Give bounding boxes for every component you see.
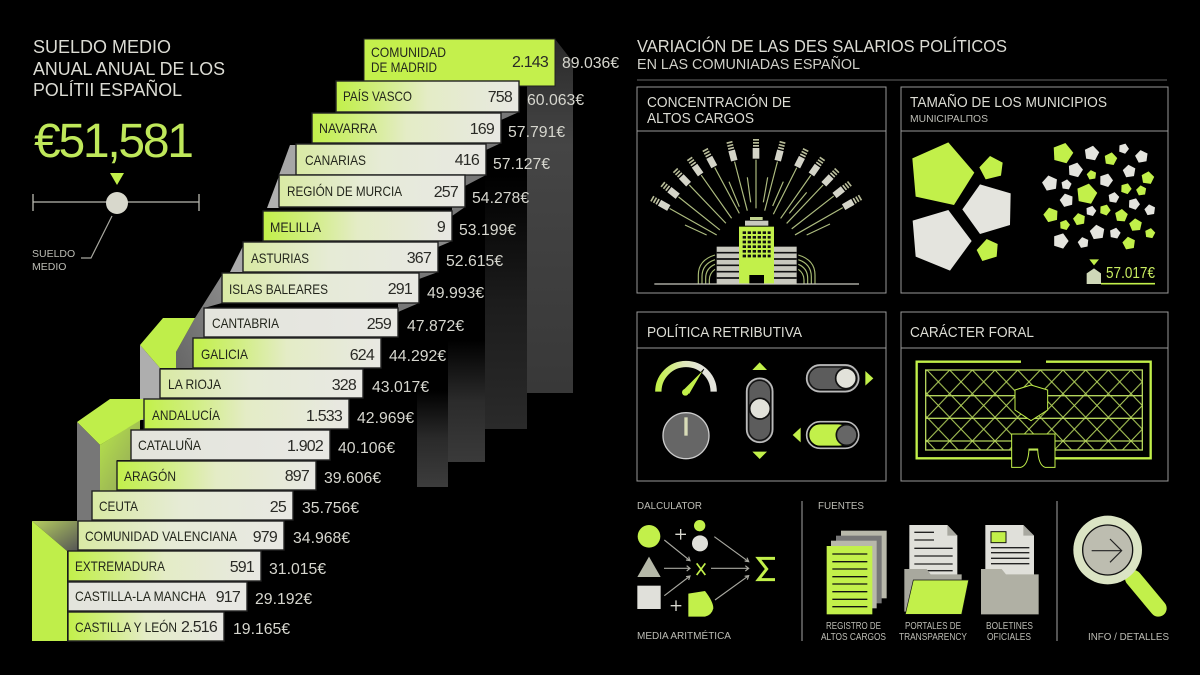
bar: La Rioja: 43.017€	[372, 379, 429, 396]
bar: Comunidad de Madrid: COMUNIDAD	[371, 44, 446, 60]
icon: rays and building	[650, 139, 862, 284]
icon: gauge and dial	[658, 364, 714, 459]
bar: Islas Baleares: 291	[388, 281, 413, 298]
bar: Cantabria: CANTABRIA	[212, 315, 280, 331]
bar: Comunidad Valenciana: 979	[253, 529, 278, 546]
bar: Región de Murcia: REGIÓN DE MURCIA	[287, 183, 403, 199]
bar: Andalucía: 1.533	[306, 408, 343, 425]
icon: document stack	[827, 531, 887, 614]
house value: 57.017€	[1106, 265, 1155, 282]
bar: Andalucía: 42.969€	[357, 410, 414, 427]
bar: Comunidad de Madrid	[364, 39, 619, 86]
bar: Cantabria	[204, 308, 464, 337]
scale label: SUELDO	[32, 248, 75, 260]
icon: folder with documents	[904, 525, 969, 614]
bar: Región de Murcia	[279, 175, 529, 216]
bar: Cantabria: 259	[367, 316, 392, 333]
icon: magnifier	[1073, 516, 1158, 608]
bar: Melilla	[263, 211, 516, 247]
bar: Cantabria: 47.872€	[407, 318, 464, 335]
source labels: ALTOS CARGOS	[821, 631, 886, 643]
bar: Cataluña	[131, 430, 395, 460]
bar: Ceuta: CEUTA	[99, 498, 139, 514]
section: sources	[818, 500, 1039, 643]
bar: Castilla y León: CASTILLA Y LEÓN	[75, 619, 177, 635]
bar: Islas Baleares: ISLAS BALEARES	[229, 281, 328, 297]
bar: Navarra: 57.791€	[508, 124, 565, 141]
right heading: VARIACIÓN DE LAS DES SALARIOS POLÍTICOS	[637, 35, 1007, 56]
bar: Asturias: 367	[407, 250, 432, 267]
bar: Galicia: GALICIA	[201, 346, 249, 362]
bar: Melilla: MELILLA	[270, 219, 322, 235]
bar: Castilla-La Mancha	[68, 582, 312, 611]
bar: Andalucía	[144, 399, 414, 429]
bar: Extremadura	[68, 551, 326, 581]
bar: Melilla: 53.199€	[459, 222, 516, 239]
bar: Asturias: 52.615€	[446, 253, 503, 270]
bar: País Vasco: PAÍS VASCO	[343, 88, 412, 104]
bar: Asturias: ASTURIAS	[251, 250, 309, 266]
bar: Andalucía: ANDALUCÍA	[152, 407, 221, 423]
bar: Castilla-La Mancha: CASTILLA-LA MANCHA	[75, 588, 207, 604]
bar: Asturias	[243, 242, 503, 279]
bar: Cataluña: 40.106€	[338, 440, 395, 457]
bar: Castilla y León: 2.516	[181, 619, 218, 636]
bar: País Vasco: 758	[488, 89, 513, 106]
bar: Melilla: 9	[437, 219, 446, 236]
bar: País Vasco	[336, 81, 584, 120]
bar: La Rioja: LA RIOJA	[168, 376, 222, 392]
panel: tamaño de los municipios	[901, 87, 1168, 293]
title: POLÍTII ESPAÑOL	[33, 79, 182, 100]
bar: Extremadura: EXTREMADURA	[75, 558, 166, 574]
bar: Navarra	[312, 113, 565, 150]
bar: Galicia: 44.292€	[389, 348, 446, 365]
panel: concentración de altos cargos	[637, 87, 886, 293]
bar: Ceuta	[92, 491, 359, 520]
bar: Galicia	[193, 338, 446, 368]
bar: Extremadura: 31.015€	[269, 561, 326, 578]
bar: Comunidad de Madrid: DE MADRID	[371, 59, 437, 75]
bar: Aragón	[117, 461, 381, 490]
panel: average salary	[32, 36, 225, 273]
bar: Región de Murcia: 257	[434, 184, 459, 201]
panel: política retributiva	[637, 312, 886, 481]
calculator heading: DALCULATOR	[637, 500, 702, 512]
bar: Aragón: 39.606€	[324, 470, 381, 487]
source labels	[821, 620, 1033, 643]
panel heading: POLÍTICA RETRIBUTIVA	[647, 324, 802, 341]
bar: Comunidad Valenciana: COMUNIDAD VALENCIANA	[85, 528, 238, 544]
bar: Islas Baleares	[222, 273, 484, 312]
calculator caption: MEDIA ARITMÉTICA	[637, 629, 731, 642]
bar: La Rioja	[160, 369, 429, 398]
magnifier label: INFO / DETALLES	[1088, 631, 1169, 643]
bar: Castilla-La Mancha: 917	[216, 589, 241, 606]
bar: Cataluña: 1.902	[287, 438, 324, 455]
bar: Ceuta: 35.756€	[302, 500, 359, 517]
bar: Aragón: ARAGÓN	[124, 468, 176, 484]
bar: Navarra: 169	[470, 121, 495, 138]
title: ANUAL ANUAL DE LOS	[33, 58, 225, 79]
source labels: BOLETINES	[986, 620, 1033, 632]
bar: Ceuta: 25	[270, 499, 287, 516]
source labels: TRANSPARENCY	[899, 631, 967, 643]
bar: Región de Murcia: 54.278€	[472, 190, 529, 207]
right heading	[637, 35, 1167, 80]
bar: La Rioja: 328	[332, 377, 357, 394]
scale label: MEDIO	[32, 261, 66, 273]
icon: small pentagon cluster	[1041, 140, 1156, 250]
right heading: EN LAS COMUNIADAS ESPAÑOL	[637, 56, 860, 73]
icon: toggles	[793, 365, 873, 448]
panel heading: ALTOS CARGOS	[647, 110, 754, 127]
bar: Aragón: 897	[285, 468, 310, 485]
bar: Galicia: 624	[350, 347, 375, 364]
bar: Comunidad de Madrid: 2.143	[512, 54, 549, 71]
bar: Castilla y León: 19.165€	[233, 621, 290, 638]
source labels: PORTALES DE	[905, 620, 961, 632]
panel: carácter foral	[901, 312, 1168, 481]
icon: house marker	[1087, 259, 1155, 284]
bar: Cataluña: CATALUÑA	[138, 437, 202, 453]
bar: Islas Baleares: 49.993€	[427, 285, 484, 302]
bar: Extremadura: 591	[230, 559, 255, 576]
bar: Navarra: NAVARRA	[319, 120, 378, 136]
bar: Castilla y León	[68, 612, 290, 641]
title: SUELDO MEDIO	[33, 36, 171, 57]
scale marker	[33, 173, 199, 258]
source labels: REGISTRO DE	[826, 620, 881, 632]
icon: vertical slider	[747, 362, 773, 459]
bar: Castilla-La Mancha: 29.192€	[255, 591, 312, 608]
bar: Comunidad Valenciana: 34.968€	[293, 530, 350, 547]
source labels: OFICIALES	[987, 631, 1031, 643]
panel heading: CARÁCTER FORAL	[910, 324, 1034, 341]
bar: Comunidad Valenciana	[78, 521, 350, 550]
bar: Comunidad de Madrid: 89.036€	[562, 55, 619, 72]
icon: lattice with shield	[917, 362, 1151, 467]
icon: large pentagons	[912, 142, 1011, 271]
3D side blocks	[32, 145, 297, 641]
big number: €51,581	[34, 115, 194, 168]
icon: formula diagram	[637, 520, 775, 617]
bar: Canarias	[296, 144, 550, 186]
icon: official bulletin folder	[981, 525, 1039, 614]
bar: País Vasco: 60.063€	[527, 92, 584, 109]
panel subheading: MUNICIPALΠOS	[910, 113, 988, 125]
bar: Canarias: 57.127€	[493, 156, 550, 173]
bar: Canarias: CANARIAS	[305, 152, 366, 168]
bar: Canarias: 416	[455, 152, 480, 169]
section: calculator	[637, 500, 775, 642]
panel heading: TAMAÑO DE LOS MUNICIPIOS	[910, 94, 1107, 111]
panel heading: CONCENTRACIÓN DE	[647, 94, 791, 111]
dividers	[802, 501, 1057, 641]
depth columns	[417, 39, 573, 487]
sources heading: FUENTES	[818, 500, 864, 512]
